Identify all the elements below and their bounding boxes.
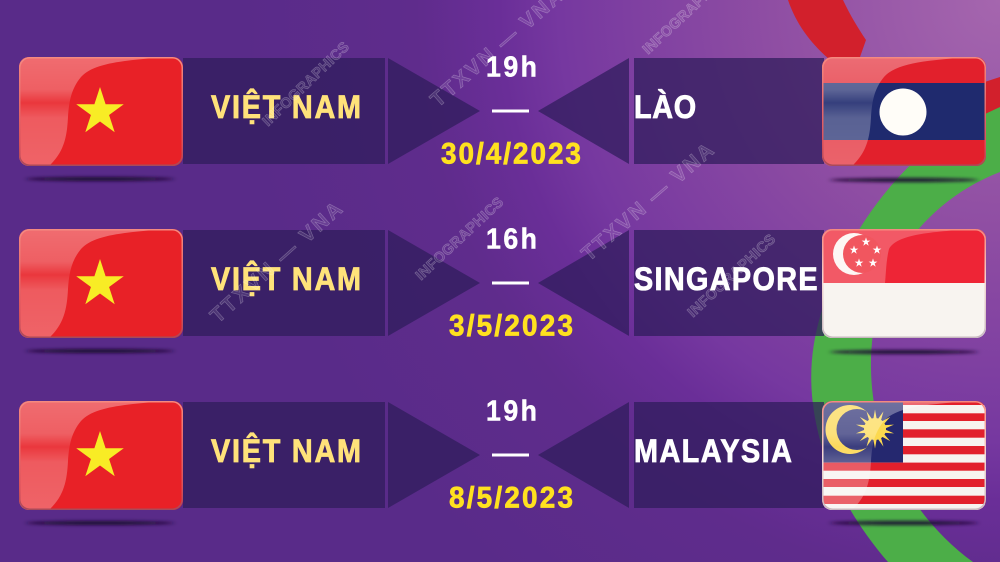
dash bbox=[492, 282, 529, 284]
flag: Vietnam bbox=[19, 229, 183, 338]
flag: Laos bbox=[822, 57, 986, 166]
left name bar bbox=[183, 230, 385, 336]
team name: Việt Nam: VIỆT NAM bbox=[211, 88, 361, 125]
right name bar bbox=[634, 58, 824, 164]
team name: Việt Nam: VIỆT NAM bbox=[211, 432, 361, 469]
right arrow bbox=[538, 230, 629, 336]
row 2: Việt Nam vs Singapore bbox=[19, 222, 986, 354]
row 1: Việt Nam vs Lào bbox=[19, 50, 986, 182]
shadow under left flag bbox=[26, 349, 174, 353]
left arrow bbox=[388, 402, 480, 508]
shadow under right flag bbox=[830, 178, 978, 182]
flag: Singapore bbox=[822, 229, 986, 338]
team name: Malaysia: MALAYSIA bbox=[634, 434, 792, 469]
watermarks: TTXVN — VNA bbox=[577, 139, 718, 266]
left arrow bbox=[388, 230, 480, 336]
shadow under left flag bbox=[26, 177, 174, 181]
flag: Malaysia bbox=[822, 401, 986, 510]
team name: Singapore: SINGAPORE bbox=[634, 262, 818, 297]
decorative red arc bbox=[788, 0, 1000, 114]
match time: 19h bbox=[486, 394, 537, 427]
dash bbox=[492, 454, 529, 456]
team name: Lào: LÀO bbox=[634, 89, 696, 125]
left name bar bbox=[183, 402, 385, 508]
match time: 16h bbox=[486, 222, 537, 255]
watermarks: TTXVN — VNA bbox=[206, 198, 347, 328]
dash bbox=[492, 110, 529, 112]
right arrow bbox=[538, 58, 629, 164]
match date: 8/5/2023 bbox=[449, 482, 573, 515]
match date: 30/4/2023 bbox=[441, 138, 581, 171]
row 3: Việt Nam vs Malaysia bbox=[19, 394, 986, 525]
shadow under right flag bbox=[830, 350, 978, 354]
flag: Vietnam bbox=[19, 401, 183, 510]
watermarks: INFOGRAPHICS bbox=[685, 231, 779, 321]
match date: 3/5/2023 bbox=[449, 310, 573, 343]
shadow under left flag bbox=[26, 521, 174, 525]
team name: Việt Nam: VIỆT NAM bbox=[211, 260, 361, 297]
match time: 19h bbox=[486, 50, 537, 83]
watermarks: INFOGRAPHICS bbox=[413, 194, 507, 284]
watermarks bbox=[206, 0, 779, 328]
watermarks: INFOGRAPHICS bbox=[260, 39, 353, 130]
right name bar bbox=[634, 402, 824, 508]
shadow under right flag bbox=[830, 521, 978, 525]
right arrow bbox=[538, 402, 629, 508]
flag: Vietnam bbox=[19, 57, 183, 166]
right name bar bbox=[634, 230, 824, 336]
decorative green ring bbox=[811, 107, 1000, 562]
left arrow bbox=[388, 58, 480, 164]
left name bar bbox=[183, 58, 385, 164]
